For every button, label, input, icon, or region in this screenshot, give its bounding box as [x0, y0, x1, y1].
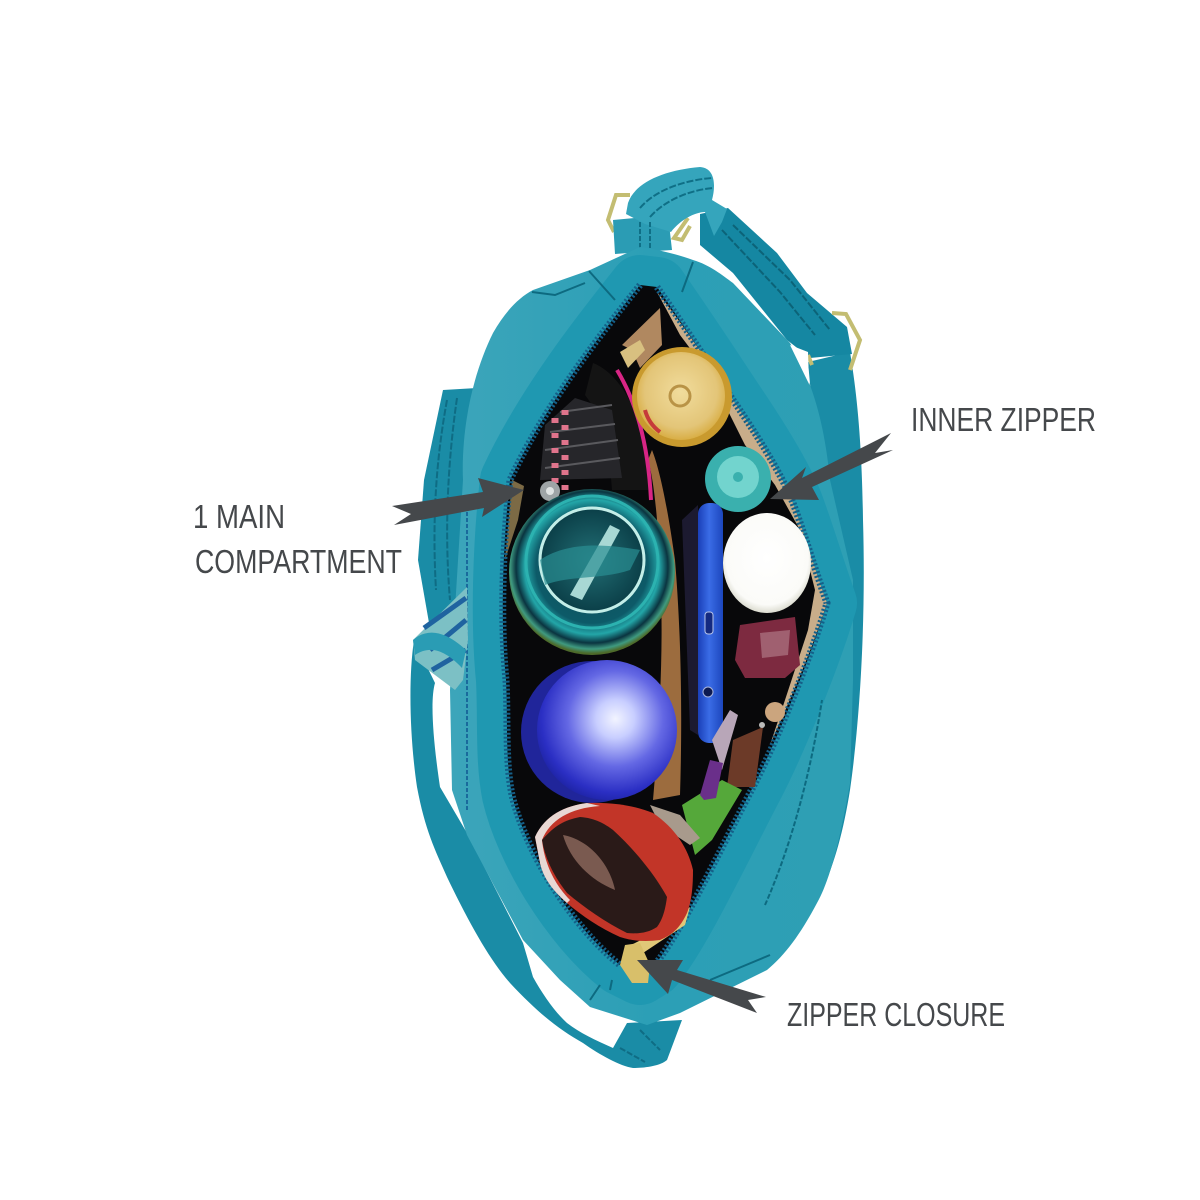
label: inner zipper: INNER ZIPPER	[911, 401, 1096, 438]
label: 1 main compartment: COMPARTMENT	[195, 543, 402, 580]
brown inner zipper	[648, 450, 681, 800]
white bottle	[723, 513, 811, 613]
top strap ring loop	[613, 167, 727, 254]
left long strap	[410, 640, 682, 1068]
arrow: main compartment	[392, 478, 524, 525]
tan inner lining right	[657, 292, 827, 745]
nail polish bottle	[735, 617, 800, 678]
bag seams	[467, 262, 822, 1000]
strap tie knot	[413, 587, 468, 690]
bag body	[450, 247, 853, 1025]
lower right strap	[780, 352, 864, 908]
label: 1 main compartment: 1 MAIN	[193, 498, 285, 535]
zipper teeth	[503, 285, 827, 967]
hair brush	[540, 363, 651, 500]
gold strap rings	[608, 195, 860, 370]
leather zip tab	[620, 308, 662, 368]
main zipper slider	[620, 943, 650, 983]
blue purple jar	[521, 660, 677, 803]
gold compact	[632, 347, 732, 447]
arrow: inner zipper	[770, 433, 893, 500]
zipper pull tab inside	[627, 907, 690, 955]
red sunglasses	[535, 803, 693, 941]
green bottle	[682, 780, 742, 855]
perfume bottle and pearl	[727, 702, 785, 787]
label: zipper closure: ZIPPER CLOSURE	[787, 996, 1005, 1033]
bag rim around opening	[503, 285, 827, 975]
interior opening	[503, 285, 827, 975]
purple pen	[700, 710, 738, 800]
teal bottle cap	[705, 446, 771, 512]
tan inner lining left	[505, 480, 524, 560]
top right strap	[700, 208, 852, 358]
arrow: zipper closure	[637, 960, 766, 1013]
white gap at shoulder	[790, 345, 809, 384]
teal iridescent jar	[509, 489, 675, 655]
label: 1 main compartment	[193, 498, 402, 580]
bag illustration	[410, 167, 864, 1068]
silver sunglasses hinge	[650, 805, 700, 845]
small silver cap	[540, 481, 560, 501]
blue phone	[682, 503, 723, 743]
left pocket	[418, 388, 480, 640]
